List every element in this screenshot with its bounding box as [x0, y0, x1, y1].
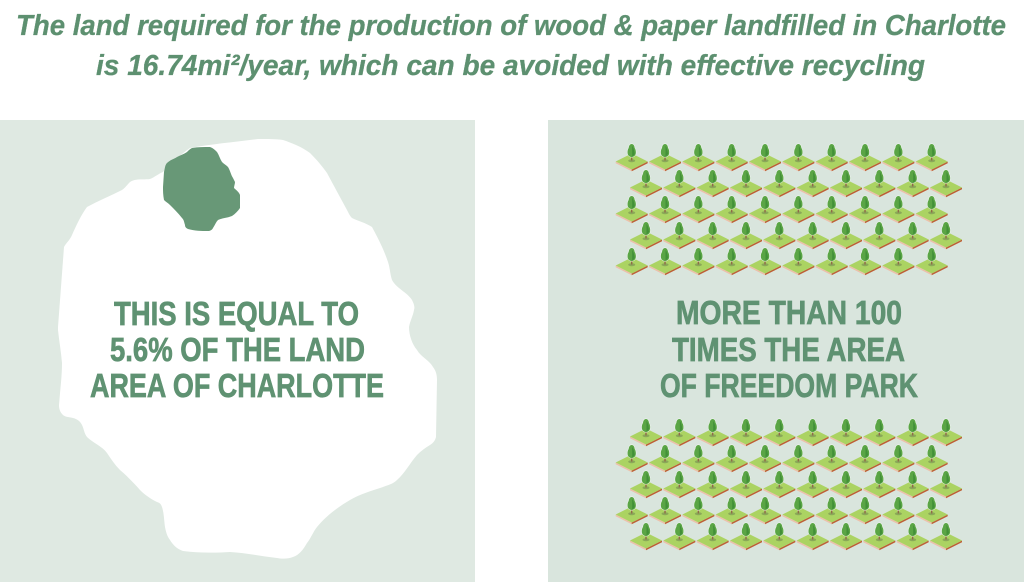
icon grid: trees, upper [616, 144, 962, 275]
title [16, 10, 1006, 82]
map: land area highlight [163, 147, 240, 231]
text: equal to 5.6% [90, 295, 384, 404]
text: equal to 5.6%: AREA OF CHARLOTTE [90, 367, 384, 404]
text: equal to 5.6%: 5.6% OF THE LAND [110, 331, 365, 368]
text: more than 100 times [660, 294, 918, 404]
text: more than 100 times: TIMES THE AREA [672, 331, 905, 368]
icon grid: trees, lower [616, 419, 962, 550]
text: more than 100 times: MORE THAN 100 [676, 294, 902, 331]
text: more than 100 times: OF FREEDOM PARK [660, 367, 918, 404]
panel: Freedom Park comparison [548, 120, 1024, 582]
panel: Charlotte land share [0, 120, 475, 582]
map: Charlotte outline [58, 139, 437, 559]
title: is 16.74mi²/year, which can be avoided with effective recycling [96, 50, 925, 82]
text: equal to 5.6%: THIS IS EQUAL TO [114, 295, 359, 332]
